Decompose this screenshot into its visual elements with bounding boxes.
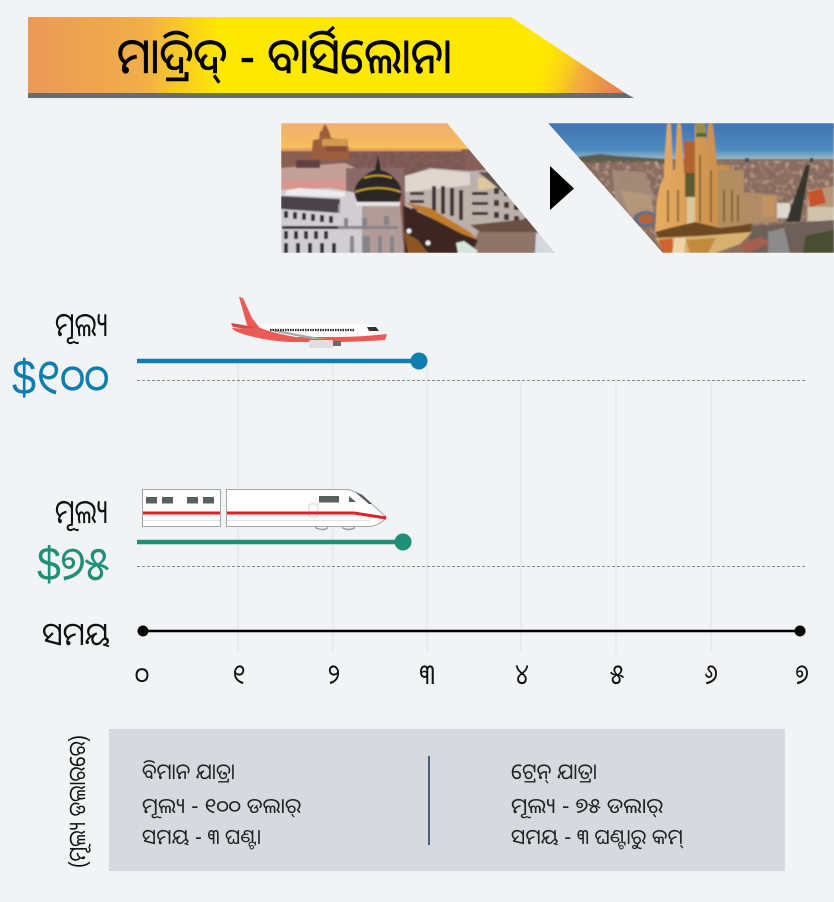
arrow between photos [550, 166, 574, 210]
price line: flight [137, 352, 428, 370]
time axis numbers: ୦ [135, 659, 149, 690]
train summary: ମୂଲ୍ୟ - ୭୫ ଡଲାର୍ [511, 795, 663, 819]
flight summary: ସମୟ - ୩ ଘଣ୍ଟା [142, 826, 261, 850]
time axis [138, 626, 806, 636]
price label: train: ମୂଲ୍ୟ [55, 493, 108, 532]
flight summary: ବିମାନ ଯାତ୍ରା [142, 759, 235, 784]
photo: Madrid skyline [281, 123, 561, 253]
time axis numbers: ୫ [610, 659, 624, 690]
time axis numbers: ୭ [796, 659, 809, 690]
train icon [142, 490, 386, 530]
summary panel [109, 729, 785, 871]
price line: train [137, 534, 412, 550]
airplane icon [231, 297, 387, 348]
train summary [511, 759, 684, 850]
city texture: Barcelona [560, 161, 834, 236]
time axis numbers: ୬ [704, 659, 718, 690]
flight summary: ମୂଲ୍ୟ - ୧୦୦ ଡଲାର୍ [142, 795, 301, 819]
price value: train: $୭୫ [37, 537, 109, 590]
right facade [404, 167, 526, 238]
time axis numbers: ୩ [420, 659, 435, 690]
dome [354, 155, 402, 203]
left building [281, 188, 362, 253]
city texture: Madrid [282, 151, 466, 172]
time axis numbers: ୨ [328, 659, 340, 690]
price label: flight: ମୂଲ୍ୟ [55, 306, 108, 345]
time label: ସମୟ [42, 616, 110, 652]
plaza [633, 211, 659, 227]
price value: flight: $୧୦୦ [12, 351, 109, 405]
title: ମାଦ୍ରିଦ୍ - ବାର୍ସିଲୋନା [117, 26, 452, 84]
vertical grid lines [238, 364, 711, 652]
time axis numbers: ୪ [516, 659, 529, 690]
flight summary [142, 759, 301, 850]
time axis numbers: ୧ [232, 659, 246, 690]
basilica [654, 123, 732, 232]
rotated note: price in dollars: (ମୂଲ୍ୟ ଡଲାରରେ) [64, 735, 91, 868]
photo: Barcelona with Sagrada Familia [548, 122, 834, 253]
title banner [28, 17, 634, 98]
train summary: ସମୟ - ୩ ଘଣ୍ଟାରୁ କମ୍ [511, 826, 684, 850]
road [403, 205, 478, 253]
time axis numbers [135, 659, 809, 690]
train summary: ଟ୍ରେନ୍ ଯାତ୍ରା [511, 759, 597, 784]
